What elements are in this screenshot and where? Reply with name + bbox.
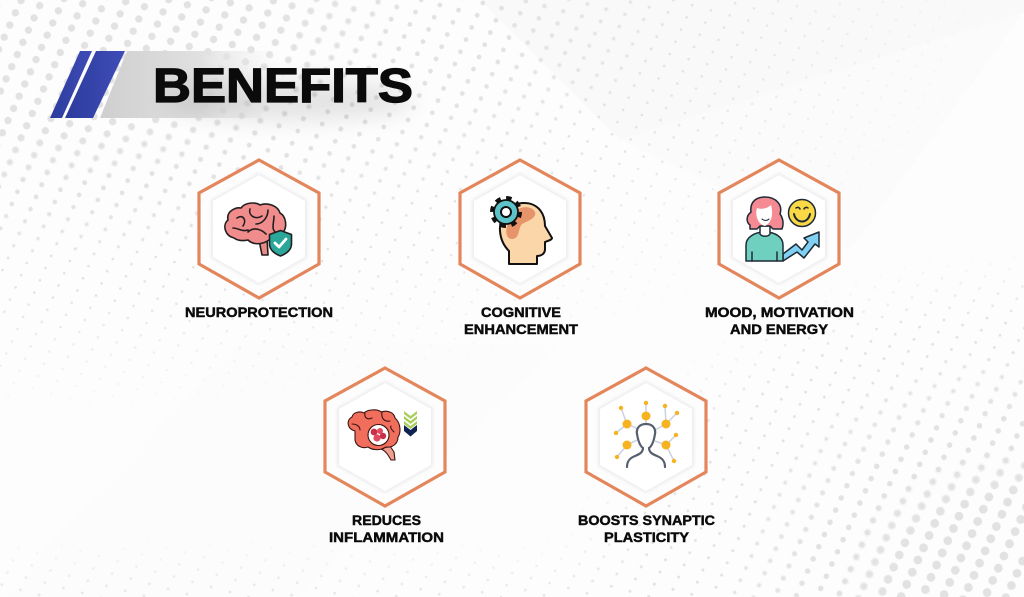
- decorative blue bars: [50, 51, 125, 118]
- icon: brain with shield: [225, 203, 292, 256]
- benefit: boosts synaptic plasticity: PLASTICITY: [604, 530, 689, 545]
- icon: woman, smiley and rising arrow: [746, 197, 819, 261]
- benefit: neuroprotection: [185, 160, 333, 320]
- hexagon frame: [325, 368, 445, 506]
- label: COGNITIVE: [481, 305, 561, 320]
- benefit: boosts synaptic plasticity: [578, 368, 715, 545]
- label: REDUCES: [352, 513, 421, 528]
- benefit: mood, motivation and energy: [705, 160, 854, 337]
- hexagon frame: [199, 160, 319, 298]
- title banner: [50, 51, 415, 120]
- hexagon frame: [460, 160, 580, 298]
- benefit: reduces inflammation: INFLAMMATION: [329, 530, 444, 545]
- label: MOOD, MOTIVATION: [705, 305, 854, 320]
- icon: person with neural network: [614, 401, 679, 467]
- icon: inflamed brain with down chevrons: [348, 410, 417, 460]
- benefit: mood, motivation and energy: AND ENERGY: [730, 322, 828, 337]
- benefit: cognitive enhancement: [460, 160, 580, 337]
- label: BOOSTS SYNAPTIC: [578, 513, 715, 528]
- title: BENEFITS: [153, 60, 413, 113]
- hexagon frame: [719, 160, 839, 298]
- benefit: reduces inflammation: [325, 368, 445, 545]
- label: NEUROPROTECTION: [185, 305, 333, 320]
- hexagon frame: [586, 368, 706, 506]
- icon: head with gear: [492, 198, 552, 264]
- benefit: cognitive enhancement: ENHANCEMENT: [464, 322, 579, 337]
